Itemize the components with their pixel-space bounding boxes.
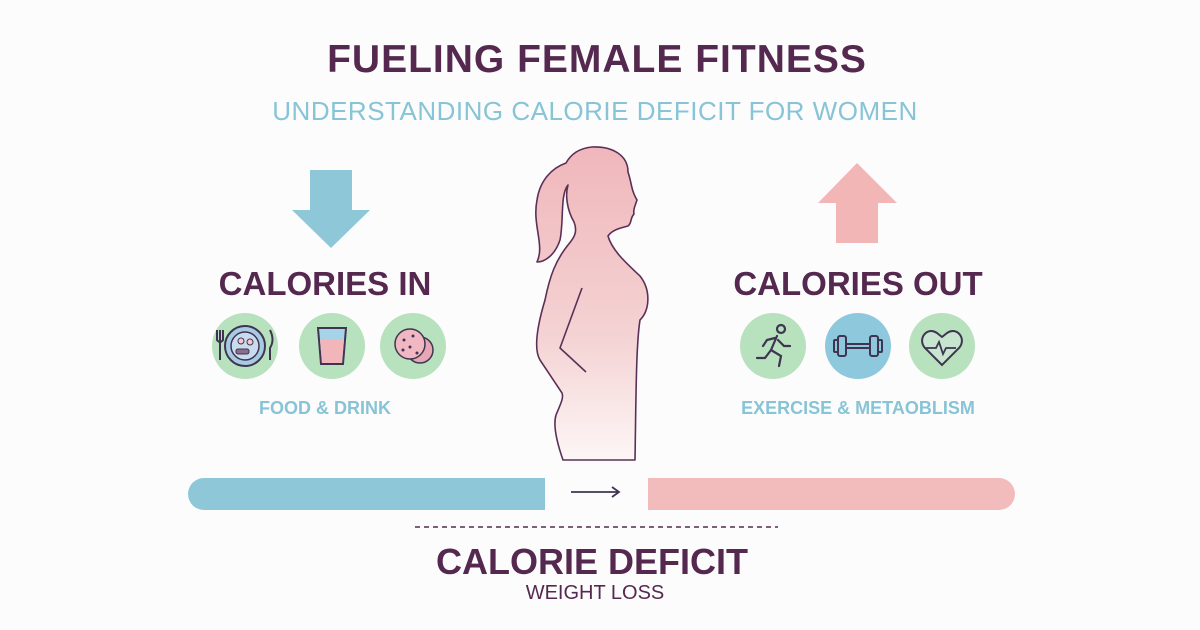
icons: exercise & metabolism [740,313,975,379]
label: exercise: EXERCISE & METAOBLISM [741,398,975,418]
icons: food & drink [212,313,446,379]
bar: calories out [648,478,1015,510]
arrow: up (calories out) [818,163,897,243]
label: food & drink: FOOD & DRINK [259,398,391,418]
arrow: down (calories in) [292,170,370,248]
heading: calories in: CALORIES IN [219,265,431,302]
subheading: weight loss: WEIGHT LOSS [526,582,664,604]
figure: woman silhouette [536,147,648,460]
title: FUELING FEMALE FITNESS [327,38,867,81]
bar: calories in [188,478,545,510]
subtitle: UNDERSTANDING CALORIE DEFICIT FOR WOMEN [272,96,918,126]
arrow: bar connector [571,487,619,497]
heading: calorie deficit: CALORIE DEFICIT [436,541,748,582]
heading: calories out: CALORIES OUT [733,265,983,302]
